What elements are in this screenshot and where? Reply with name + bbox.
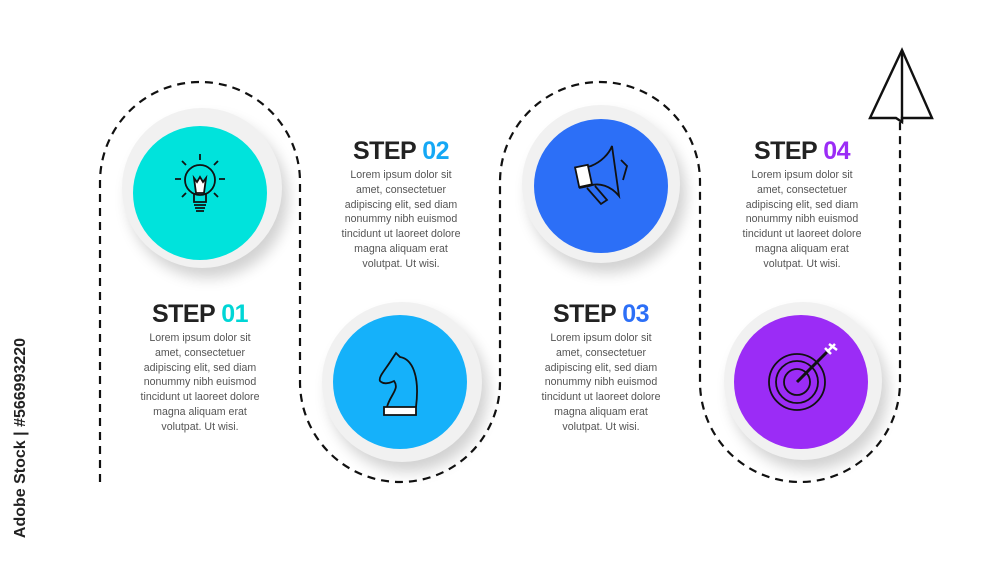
step 01 text: volutpat. Ut wisi.	[161, 421, 239, 433]
icon: megaphone	[574, 146, 628, 206]
step 01 text: tincidunt ut laoreet dolore	[141, 391, 259, 403]
step 02 text: tincidunt ut laoreet dolore	[342, 228, 460, 240]
step 03 text: magna aliquam erat	[554, 406, 648, 418]
step 04 text: amet, consectetuer	[757, 184, 847, 196]
step 02 text: STEP 02	[353, 137, 449, 165]
step 04 text: Lorem ipsum dolor sit	[751, 169, 853, 181]
step 01 text: amet, consectetuer	[155, 347, 245, 359]
circle 4	[724, 302, 894, 476]
step 02 text: nonummy nibh euismod	[345, 213, 457, 225]
step 03 text: Lorem ipsum dolor sit	[550, 332, 652, 344]
step 02 text: amet, consectetuer	[356, 184, 446, 196]
step 04 text: adipiscing elit, sed diam	[746, 199, 858, 211]
step 01 text: STEP 01	[152, 300, 248, 328]
step 03 text: tincidunt ut laoreet dolore	[542, 391, 660, 403]
step 03 text: adipiscing elit, sed diam	[545, 362, 657, 374]
step 02 text	[342, 137, 460, 270]
step 03 text: nonummy nibh euismod	[545, 376, 657, 388]
circle 3	[522, 105, 692, 278]
step 01 text: Lorem ipsum dolor sit	[149, 332, 251, 344]
step 04 text: volutpat. Ut wisi.	[763, 258, 841, 270]
step 04 text: magna aliquam erat	[755, 243, 849, 255]
step 02 text: magna aliquam erat	[354, 243, 448, 255]
step 04 text: tincidunt ut laoreet dolore	[743, 228, 861, 240]
step 02 text: volutpat. Ut wisi.	[362, 258, 440, 270]
icon: target	[768, 343, 838, 411]
icon: paper plane	[868, 47, 934, 124]
watermark id: Adobe Stock | #566993220	[12, 338, 29, 538]
step 04 text	[742, 137, 861, 270]
step 03 text: STEP 03	[553, 300, 649, 328]
step 03 text: volutpat. Ut wisi.	[562, 421, 640, 433]
step 03 text	[542, 300, 660, 433]
step 02 text: Lorem ipsum dolor sit	[350, 169, 452, 181]
step 04 text: STEP 04	[754, 137, 850, 165]
icon: chess knight	[378, 352, 418, 416]
step 01 text: nonummy nibh euismod	[144, 376, 256, 388]
step 01 text: magna aliquam erat	[153, 406, 247, 418]
icon: light bulb	[175, 154, 225, 212]
step 01 text: adipiscing elit, sed diam	[144, 362, 256, 374]
circle 1	[122, 108, 294, 284]
circle 2	[322, 302, 494, 478]
step 04 text: nonummy nibh euismod	[746, 213, 858, 225]
step 03 text: amet, consectetuer	[556, 347, 646, 359]
step 02 text: adipiscing elit, sed diam	[345, 199, 457, 211]
step 01 text	[140, 300, 259, 433]
